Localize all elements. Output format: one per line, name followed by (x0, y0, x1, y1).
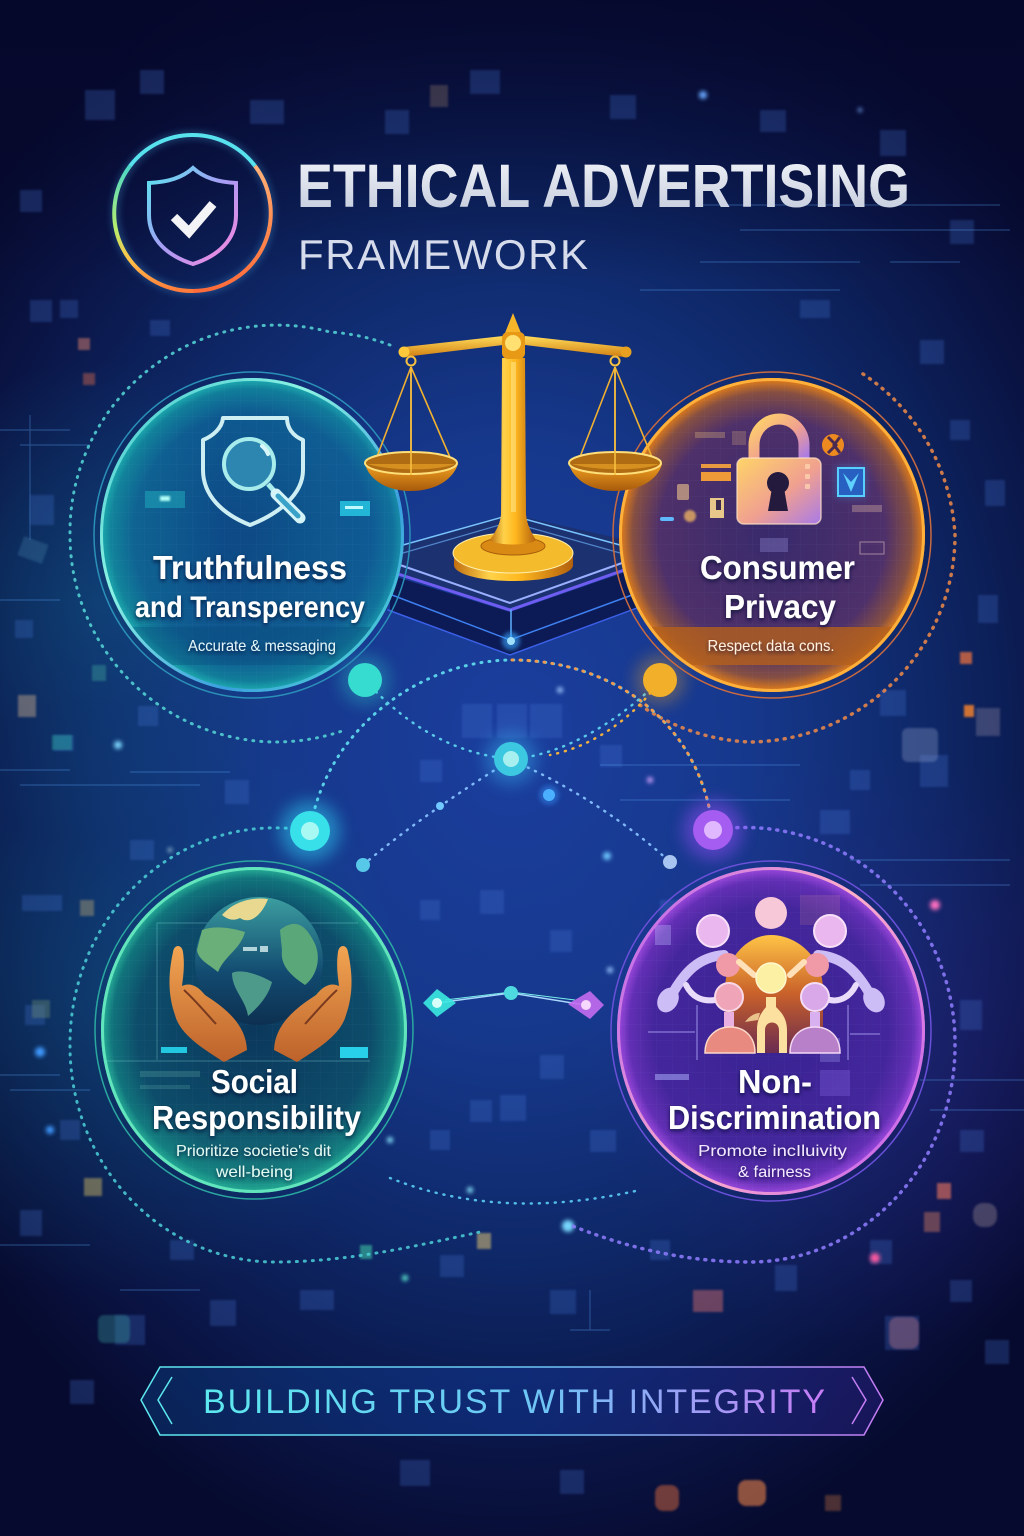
icon: padlock (737, 419, 821, 524)
label: Social Responsibility text (152, 1063, 362, 1181)
label: Consumer Privacy text: Respect data cons. (708, 638, 834, 655)
node: left cyan (280, 801, 340, 861)
label: Non-Discrimination text: Discrimination (668, 1099, 881, 1136)
icon: diverse group of people (653, 897, 889, 1053)
title: ETHICAL ADVERTISING (297, 152, 910, 220)
banner: tagline (141, 1367, 883, 1435)
label: Truthfulness and Transparency text: and Transperency (135, 591, 365, 624)
beam (398, 336, 632, 366)
platform under scale (388, 514, 637, 655)
label: Social Responsibility text: Responsibility (152, 1099, 362, 1136)
panel: Social Responsibility (95, 861, 415, 1199)
scale strings (375, 367, 654, 475)
column (490, 313, 536, 540)
label: Non-Discrimination text (668, 1063, 881, 1181)
logo: shield check badge (114, 135, 271, 291)
label: Truthfulness and Transparency text (135, 549, 365, 655)
icon: data box (836, 466, 866, 498)
link between lower circles (423, 986, 604, 1019)
label: Consumer Privacy text (700, 549, 855, 655)
panel: Non-Discrimination (611, 861, 932, 1201)
node: teal (340, 655, 390, 705)
label: Truthfulness and Transparency text: Truthfulness (153, 549, 347, 586)
subtitle: FRAMEWORK (298, 231, 588, 278)
icon: orange dial (822, 434, 844, 456)
label: Non-Discrimination text: Non- (738, 1063, 812, 1100)
label: Truthfulness and Transparency text: Accurate & messaging (188, 638, 336, 655)
icon: shield with magnifier (203, 418, 303, 525)
node: right purple (683, 800, 743, 860)
label: Non-Discrimination text: Promote incIluivity (698, 1143, 847, 1160)
label: Social Responsibility text: Prioritize societie's dit (176, 1143, 332, 1160)
node: center cyan (485, 733, 537, 785)
label: Consumer Privacy text: Privacy (724, 588, 837, 625)
dotted orbit rings (70, 325, 955, 1262)
title (297, 152, 910, 278)
panel: Consumer Privacy (613, 372, 935, 698)
label: Non-Discrimination text: & fairness (738, 1164, 811, 1181)
label: Social Responsibility text: well-being (215, 1164, 293, 1181)
banner: tagline: BUILDING TRUST WITH INTEGRITY (203, 1383, 825, 1421)
icon: globe in hands (169, 897, 352, 1062)
left pan (365, 367, 458, 491)
label: Consumer Privacy text: Consumer (700, 549, 855, 586)
icon: golden scales of justice (365, 313, 662, 581)
panel: Truthfulness and Transparency (94, 372, 415, 698)
label: Social Responsibility text: Social (211, 1063, 298, 1100)
base (453, 515, 573, 581)
right pan (569, 367, 662, 491)
small nodes (356, 785, 677, 872)
node: gold (635, 655, 685, 705)
connector network (280, 655, 743, 1019)
